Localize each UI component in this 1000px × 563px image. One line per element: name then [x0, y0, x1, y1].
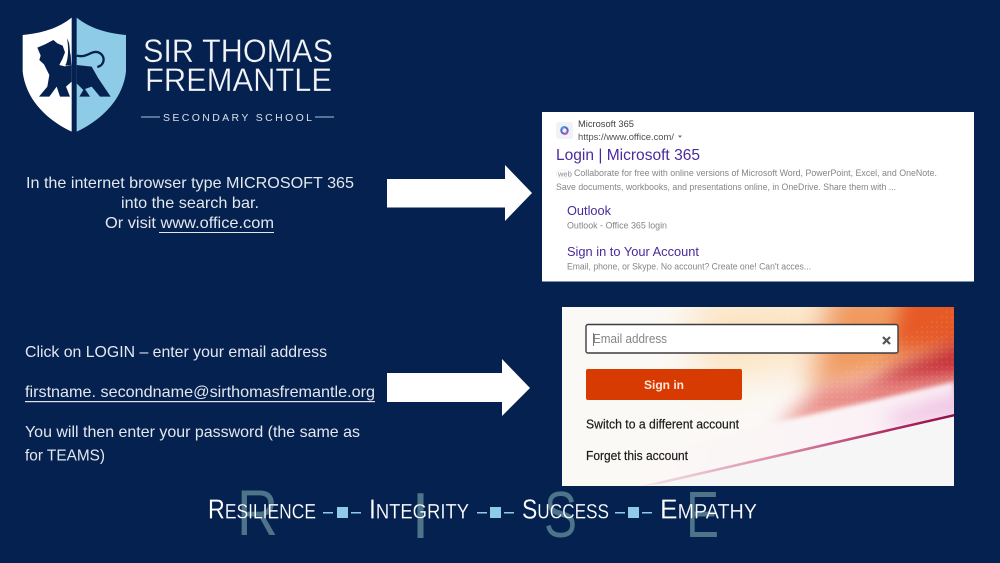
value: Resilience: RESILIENCE: [208, 494, 316, 524]
separator: [323, 507, 361, 518]
step 2 instructions: You will then enter your password (the same as: [25, 424, 360, 441]
step 2 instructions: for TEAMS): [25, 448, 105, 464]
large RISE letters: E: [686, 478, 719, 551]
icon: shield with lion: [23, 18, 126, 132]
large RISE letters: I: [412, 479, 430, 552]
school name: SIR THOMAS: [143, 33, 333, 69]
sitelink: sign in: Email, phone, or Skype. No account? Create one! Can't acces...: [567, 262, 811, 272]
step 2 instructions: firstname. secondname@sirthomasfremantle.org: [25, 384, 375, 401]
school name: FREMANTLE: [145, 62, 332, 98]
forget account link: Forget this account: [586, 449, 688, 463]
step 1 instructions: [26, 175, 354, 233]
email input: [586, 324, 898, 353]
sign in background artwork: [562, 307, 954, 486]
arrow: step 2: [387, 359, 530, 416]
sitelink: Outlook: Outlook: [567, 204, 612, 218]
result description: web: [557, 170, 572, 178]
sitelink: Outlook: [567, 204, 667, 232]
step 1 instructions: Or visit www.office.com: [105, 215, 274, 232]
arrow: step 1: [387, 165, 532, 221]
panel: sign in screenshot: [562, 307, 954, 486]
value: Integrity: INTEGRITY: [369, 494, 469, 524]
sitelink: sign in: Sign in to Your Account: [567, 245, 700, 259]
large RISE letters: R: [237, 476, 278, 549]
panel: search result screenshot: https://www.office.com/: [578, 132, 674, 143]
step 1 instructions: into the search bar.: [121, 195, 259, 212]
result description: [556, 168, 937, 193]
separator: [615, 507, 652, 518]
switch account link: Switch to a different account: [586, 418, 740, 432]
large RISE letters: S: [544, 478, 577, 551]
school name: [143, 33, 333, 98]
secondary school strapline: SECONDARY SCHOOL: [163, 112, 312, 124]
step 1 instructions: In the internet browser type MICROSOFT 365: [26, 175, 354, 192]
value: Success: SUCCESS: [522, 494, 609, 524]
step 2 instructions: [25, 344, 375, 464]
sitelink: sign in: [567, 245, 811, 272]
result title: Login | Microsoft 365: [556, 147, 700, 164]
sitelink: Outlook: Outlook - Office 365 login: [567, 220, 667, 232]
panel: search result screenshot: Microsoft 365: [578, 119, 634, 130]
icon: Microsoft 365: [556, 122, 573, 139]
sign in button: Sign in: [644, 378, 684, 392]
result description: Save documents, workbooks, and presentations online, in OneDrive. Share them with ...: [556, 182, 896, 193]
sign in button: [586, 369, 742, 400]
RISE values strip: [208, 476, 757, 552]
result description: Collaborate for free with online versions of Microsoft Word, PowerPoint, Excel, and OneNote.: [574, 168, 937, 179]
school logo: [23, 18, 334, 132]
value: Empathy: EMPATHY: [660, 494, 757, 524]
large RISE letters: [237, 476, 719, 552]
email input: Email address: [593, 332, 667, 346]
separator: [477, 507, 514, 518]
panel: search result screenshot: [542, 112, 974, 282]
step 2 instructions: Click on LOGIN – enter your email address: [25, 344, 327, 361]
